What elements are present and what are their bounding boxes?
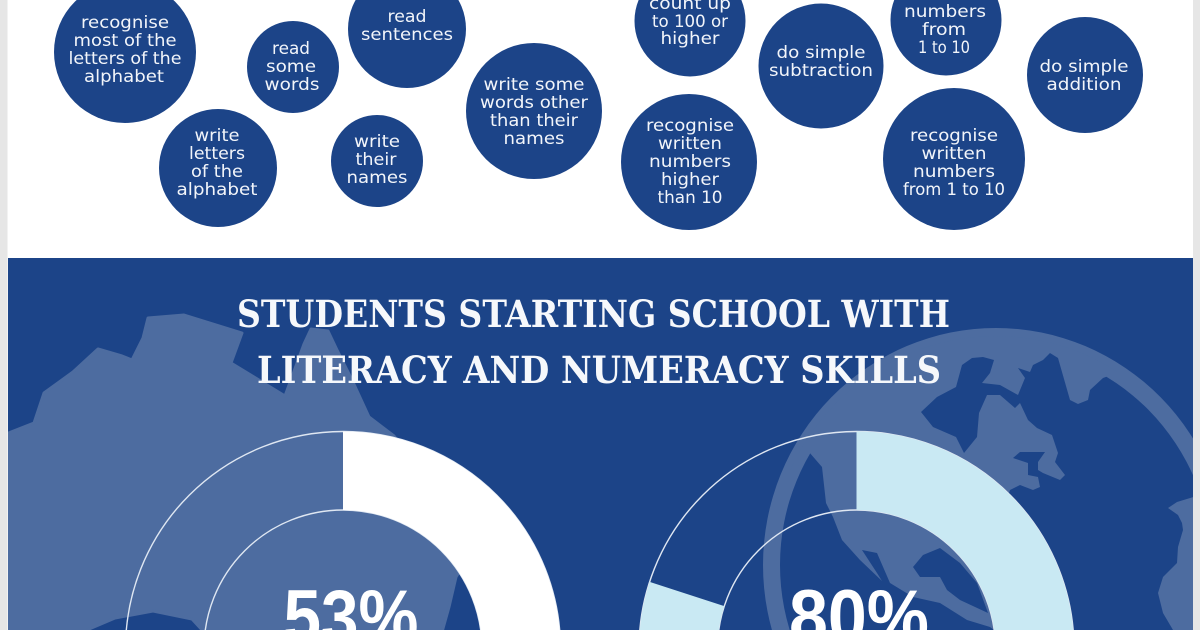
bubble: recognise most of the letters — [54, 0, 196, 123]
bubble: do simple subtraction: do simple — [776, 43, 866, 63]
bubble: recognise written numbers from 1 to 10: recognise — [910, 126, 998, 146]
bubble: recognise most of the letters: alphabet — [84, 67, 164, 87]
bubble: do simple addition — [1027, 17, 1143, 133]
heading: STUDENTS STARTING SCHOOL WITH — [237, 292, 950, 336]
bubble: write some words other than their names: than their — [490, 111, 578, 131]
donut chart: 53% literacy — [126, 432, 560, 630]
bubble: do simple addition: addition — [1046, 75, 1122, 95]
bubble: write letters of the alphabet: write — [194, 126, 240, 146]
bubble: write some words other than their names — [466, 43, 602, 179]
bubble: do simple addition: do simple — [1040, 57, 1128, 77]
bubble: recognise written numbers from 1 to 10: from 1 to 10 — [903, 180, 1005, 200]
bubble: recognise written numbers higher than 10: written — [658, 134, 722, 154]
panel: numeracy skills bubbles — [621, 0, 1143, 230]
map: Australia background — [6, 315, 470, 630]
bubble: do simple subtraction — [758, 4, 884, 128]
map: globe background — [763, 328, 1200, 630]
bubble: numbers from 1 to 10: from — [922, 20, 966, 40]
bubble: read some words: some — [266, 57, 316, 77]
panel: students starting school — [6, 258, 1200, 630]
bubble: recognise written numbers from 1 to 10 — [883, 88, 1025, 230]
bubble: write letters of the alphabet: alphabet — [176, 180, 258, 200]
bubble: write letters of the alphabet — [159, 109, 277, 227]
bubble: recognise most of the letters: recognise — [81, 13, 169, 33]
bubble: write their names — [331, 115, 423, 207]
bubble: recognise written numbers higher than 10: recognise — [646, 116, 734, 136]
bubble: recognise most of the letters: letters of the — [68, 49, 182, 69]
bubble: numbers from 1 to 10: numbers — [904, 2, 986, 22]
bubble: do simple subtraction: subtraction — [769, 61, 873, 81]
bubble: count up to 100 or higher: higher — [660, 29, 720, 49]
bubble: recognise written numbers higher than 10: than 10 — [658, 188, 722, 208]
bubble: write their names: their — [356, 150, 396, 170]
bubble: write letters of the alphabet: letters — [189, 144, 245, 164]
bubble: recognise written numbers from 1 to 10: numbers — [913, 162, 995, 182]
bubble: recognise most of the letters: most of the — [74, 31, 176, 51]
bubble: recognise written numbers higher than 10: higher — [661, 170, 719, 190]
bubble: recognise written numbers higher than 10 — [621, 94, 757, 230]
bubble: read sentences — [348, 0, 466, 88]
bubble: read some words: read — [272, 39, 310, 59]
bubble: read some words — [247, 21, 339, 113]
bubble: write some words other than their names: write some — [484, 75, 584, 95]
donut chart: 80% numeracy — [639, 432, 1074, 630]
heading — [237, 292, 950, 392]
bubble: count up to 100 or higher — [634, 0, 746, 76]
bubble: count up to 100 or higher: to 100 or — [652, 12, 728, 32]
bubble: write some words other than their names: words other — [480, 93, 588, 113]
bubble: read sentences: sentences — [361, 25, 453, 45]
bubble: write letters of the alphabet: of the — [191, 162, 243, 182]
bubble: write their names: write — [354, 132, 400, 152]
bubble: numbers from 1 to 10 — [890, 0, 1002, 76]
bubble: numbers from 1 to 10: 1 to 10 — [918, 38, 970, 58]
bubble: write their names: names — [346, 168, 408, 188]
heading: LITERACY AND NUMERACY SKILLS — [257, 348, 941, 392]
panel: literacy skills bubbles — [54, 0, 602, 227]
bubble: read sentences: read — [388, 7, 426, 27]
bubble: write some words other than their names: names — [504, 129, 565, 149]
bubble: read some words: words — [264, 75, 320, 95]
bubble: recognise written numbers from 1 to 10: written — [922, 144, 986, 164]
bubble: recognise written numbers higher than 10: numbers — [649, 152, 731, 172]
